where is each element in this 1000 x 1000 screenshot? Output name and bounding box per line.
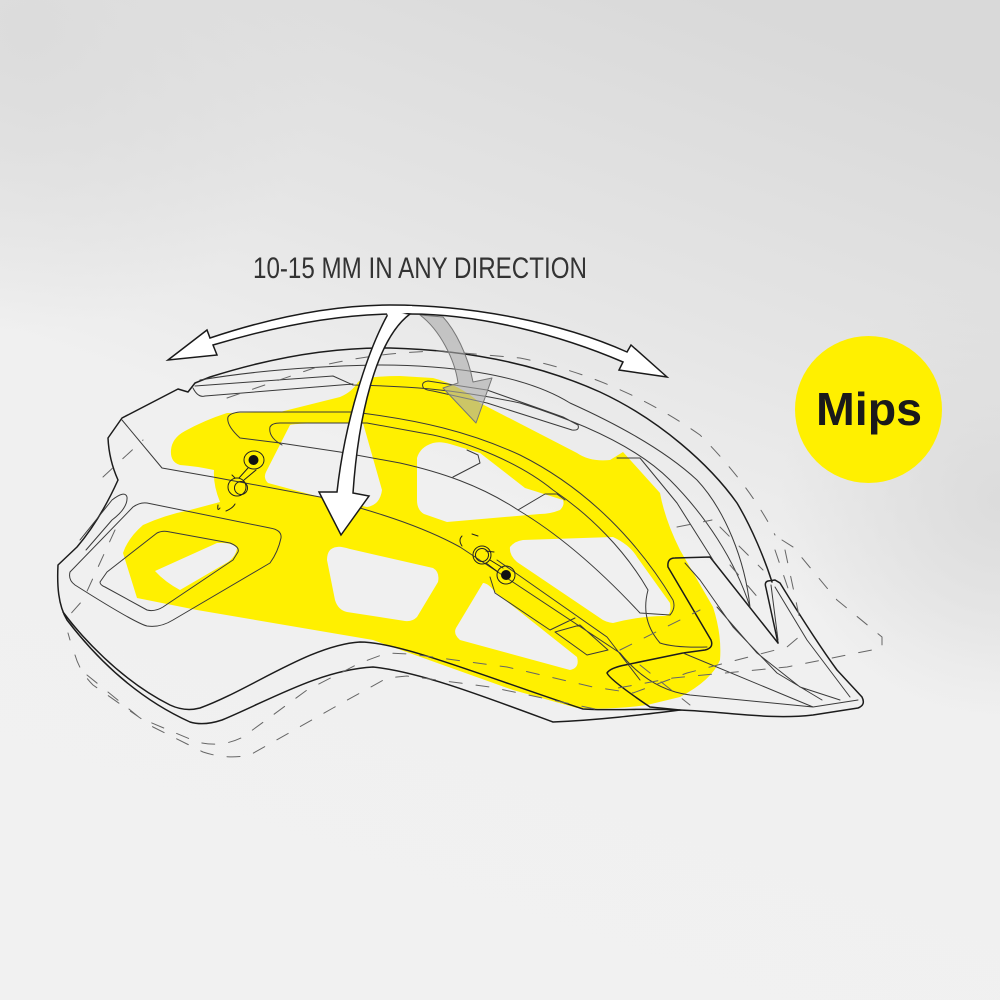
double-headed horizontal arrow — [168, 305, 667, 377]
white downward arrow — [319, 312, 410, 535]
helmet outline drawing — [58, 348, 882, 757]
lower hinge link — [460, 534, 515, 584]
helmet inner contour lines — [70, 365, 858, 707]
Mips badge — [795, 336, 942, 483]
Mips badge: Mips — [816, 383, 922, 435]
visor — [607, 557, 778, 710]
upper hinge link — [218, 451, 264, 511]
grey rear arrow — [420, 315, 492, 423]
helmet outer shell — [58, 348, 863, 724]
dashed displaced-shell outlines — [67, 351, 882, 757]
heading: 10-15 MM IN ANY DIRECTION — [253, 252, 587, 285]
yellow Mips liner with vent holes — [123, 376, 720, 709]
